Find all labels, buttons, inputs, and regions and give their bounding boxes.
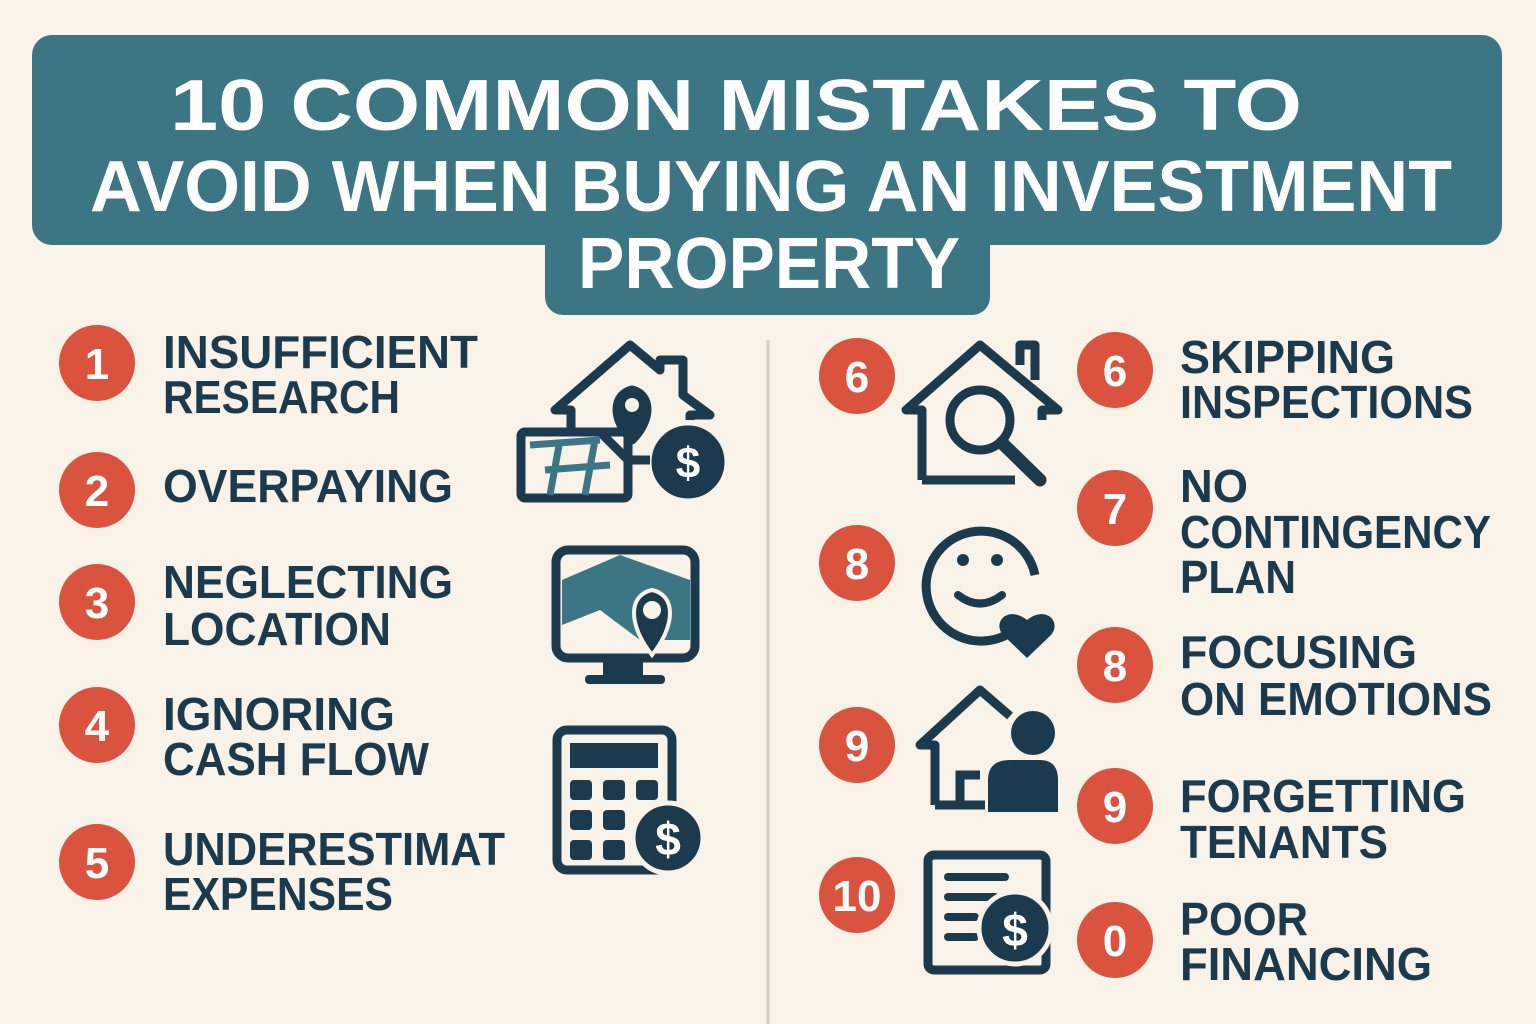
item 3: LOCATION [163, 603, 391, 655]
item 7 [1077, 460, 1491, 603]
item 10: FINANCING [1180, 938, 1432, 990]
title banner: AVOID WHEN BUYING AN INVESTMENT [90, 147, 1452, 227]
item 7: NO [1180, 460, 1248, 512]
icon: house map dollar [521, 345, 720, 498]
item 5: 5 [85, 839, 109, 888]
item 10: 0 [1103, 917, 1127, 966]
item 4: 4 [85, 702, 110, 751]
item 4: CASH FLOW [163, 733, 430, 785]
item 5: EXPENSES [163, 868, 393, 920]
item 9: FORGETTING [1180, 770, 1466, 822]
item 6: SKIPPING [1180, 331, 1395, 383]
right circles: 9 [845, 722, 869, 771]
item 2 [59, 452, 453, 528]
item 6: 6 [1103, 347, 1127, 396]
item 5: UNDERESTIMAT [163, 823, 505, 875]
right circles: 6 [845, 353, 869, 402]
icon: calculator dollar [557, 730, 703, 873]
item 1 [59, 325, 478, 423]
item 1: 1 [85, 340, 109, 389]
item 7: PLAN [1180, 551, 1296, 603]
title banner: PROPERTY [578, 224, 960, 304]
item 1: RESEARCH [163, 371, 400, 423]
item 4: IGNORING [163, 688, 395, 740]
item 2: OVERPAYING [163, 460, 453, 512]
item 7: 7 [1103, 485, 1127, 534]
title banner: 10 COMMON MISTAKES TO [170, 66, 1302, 146]
icon: house map dollar: $ [676, 439, 700, 488]
item 6: INSPECTIONS [1180, 376, 1473, 428]
title banner [32, 35, 1502, 315]
item 4 [59, 687, 430, 785]
icon: house magnifier [906, 345, 1058, 480]
item 8 [1077, 626, 1492, 725]
item 9 [1077, 768, 1466, 868]
item 9: 9 [1103, 783, 1127, 832]
item 10 [1077, 893, 1432, 990]
item 3 [59, 556, 453, 655]
right circles: 8 [845, 540, 869, 589]
item 10: POOR [1180, 893, 1308, 945]
icon: monitor location [556, 550, 695, 684]
item 9: TENANTS [1180, 816, 1388, 868]
icon: document dollar: $ [1002, 904, 1028, 956]
item 6 [1077, 331, 1473, 428]
item 8: 8 [1103, 642, 1127, 691]
icon: calculator dollar: $ [655, 813, 681, 865]
item 8: FOCUSING [1180, 626, 1417, 678]
icon: house tenant [920, 690, 1058, 812]
item 8: ON EMOTIONS [1180, 673, 1492, 725]
item 2: 2 [85, 467, 109, 516]
right circles [819, 338, 895, 933]
item 5 [59, 823, 505, 920]
icon: document dollar [928, 855, 1051, 970]
item 7: CONTINGENCY [1180, 506, 1491, 558]
item 3: 3 [85, 579, 109, 628]
item 1: INSUFFICIENT [163, 326, 478, 378]
item 3: NEGLECTING [163, 556, 453, 608]
icon: smiley heart [926, 531, 1055, 658]
right circles: 10 [833, 872, 881, 921]
